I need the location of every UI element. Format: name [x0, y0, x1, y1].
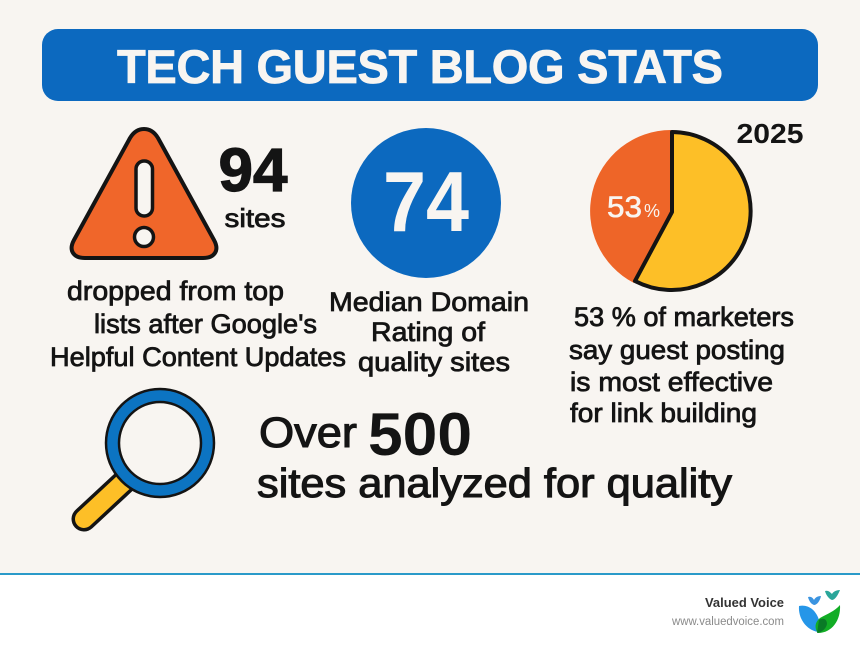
description: median domain rating of quality sites: Median Domain: [329, 287, 529, 317]
stat: over 500: 500: [368, 401, 472, 468]
pie chart: 53: [607, 191, 642, 224]
brand url: www.valuedvoice.com: [671, 616, 784, 628]
pie chart: %: [644, 201, 660, 221]
description: dropped from top lists: dropped from top: [67, 276, 284, 306]
description: dropped from top lists: lists after Google's: [94, 309, 317, 339]
description: median domain rating of quality sites: [329, 287, 529, 377]
description: dropped from top lists: [50, 276, 346, 372]
footer brand: [671, 590, 840, 633]
stat: 94: 94: [218, 136, 288, 204]
panel: median domain rating: [329, 128, 529, 377]
description: dropped from top lists: Helpful Content Updates: [50, 342, 346, 372]
description: median domain rating of quality sites: Rating of: [371, 317, 486, 347]
description: marketers say guest posting: say guest posting: [569, 335, 785, 365]
description: sites analyzed for quality: sites analyzed for quality: [257, 460, 733, 506]
panel: 53 percent of marketers: [569, 118, 804, 428]
panel: sites analyzed: [84, 396, 733, 519]
label: 2025: 2025: [736, 118, 804, 149]
brand name: Valued Voice: [705, 596, 784, 610]
description: marketers say guest posting: 53 % of marketers: [574, 302, 794, 332]
icon: blue circle with 74: 74: [383, 155, 469, 250]
label: sites: sites: [224, 203, 286, 233]
pie chart: [590, 130, 751, 290]
panel: 94 sites: [50, 129, 346, 372]
description: marketers say guest posting: for link building: [570, 398, 757, 428]
description: median domain rating of quality sites: quality sites: [358, 347, 510, 377]
icon: warning triangle: [72, 129, 216, 258]
description: marketers say guest posting: is most effective: [570, 367, 773, 397]
description: marketers say guest posting: [569, 302, 794, 428]
stat: over 500: Over: [259, 409, 357, 457]
icon: brand logo: [799, 590, 840, 633]
icon: blue circle with 74: [351, 128, 501, 278]
icon: magnifying glass: [84, 396, 208, 519]
title banner: TECH GUEST BLOG STATS: [117, 40, 723, 93]
title banner: [42, 29, 818, 101]
stat: over 500: [259, 401, 472, 468]
